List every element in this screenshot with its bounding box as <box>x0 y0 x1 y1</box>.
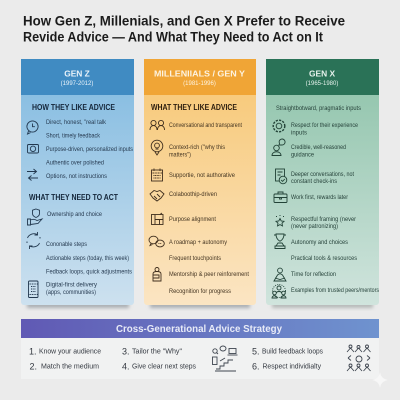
list: what they need to act: (apps, communities) <box>46 289 96 296</box>
list: gen x preferences: (never patronizing) <box>291 223 338 230</box>
list: millenial preferences: Recognition for progress <box>169 288 232 295</box>
list: gen x preferences: constant check-ins <box>291 178 338 185</box>
list: strategy steps 5-6: 5. <box>252 346 260 356</box>
list: strategy steps 1-2 <box>29 346 101 372</box>
list: gen x preferences: Practical tools & resources <box>291 255 358 262</box>
heading: Gen X <box>306 68 338 87</box>
decorative sparkle <box>372 372 388 388</box>
list: millenial preferences: A roadmap + autonomy <box>169 239 228 246</box>
heading: Millenials / Gen Y <box>154 68 245 87</box>
list: gen x preferences: inputs <box>291 130 308 136</box>
list: gen x preferences: Respect for their experience <box>291 122 358 129</box>
list: gen x preferences: Deeper conversations, not <box>291 171 354 178</box>
icon: seated person <box>274 268 286 281</box>
list: millenial preferences: Conversational and transparent <box>169 122 242 129</box>
list: gen x preferences: Time for reflection <box>291 271 336 278</box>
title: Revide Advice — And What They Need to Act on It <box>23 30 324 44</box>
icon: trophy <box>274 234 286 248</box>
list: millenial preferences: Colaboothip-driven <box>169 191 217 198</box>
icon: people cycle <box>347 345 370 371</box>
list: strategy steps 3-4: 4. <box>122 362 130 372</box>
icon: mentor <box>153 268 161 281</box>
heading: Gen X: (1965-1980) <box>306 81 338 87</box>
list: what they need to act: Ownership and choice <box>47 211 102 218</box>
panel: cross-generational strategy <box>21 319 379 379</box>
list: strategy steps 1-2: Know your audience <box>39 348 101 356</box>
list: how they like advice: Options, not instructions <box>46 173 108 180</box>
list: strategy steps 5-6: Build feedback loops <box>262 348 323 356</box>
title: How Gen Z, Millenials, and Gen X Prefer to Receive <box>23 14 345 28</box>
heading: how they like advice: HOW THEY LIKE ADVICE <box>32 103 115 112</box>
heading: Gen Z <box>61 68 93 87</box>
list: strategy steps 3-4: 3. <box>122 346 130 356</box>
list: how they like advice <box>46 119 134 180</box>
list: gen x preferences: guidance <box>291 152 314 158</box>
icon: map <box>152 213 163 224</box>
list: gen x preferences: Work first, rewards later <box>291 194 349 201</box>
list: strategy steps 3-4 <box>122 346 196 372</box>
icon: hand with shield <box>28 209 42 225</box>
icon: camera <box>28 144 38 153</box>
list: strategy steps 5-6: Respect individialty <box>262 364 321 370</box>
panel: Gen Z <box>21 59 134 308</box>
heading: Millenials / Gen Y: MILLENIIALS / GEN Y <box>154 68 245 78</box>
list: strategy steps 1-2: 1. <box>29 346 37 356</box>
list: gen x preferences <box>291 122 380 294</box>
icon: calendar <box>152 168 162 181</box>
icon: cycle arrows <box>27 232 40 249</box>
heading: strategy: Cross-Generational Advice Strategy <box>116 324 282 335</box>
icon: peer group <box>272 284 286 298</box>
list: what they need to act: Actionable steps (today, this week) <box>46 255 129 262</box>
list: gen x preferences: Examples from trusted peers/mentors <box>291 287 380 294</box>
heading: Gen X: GEN X <box>309 68 335 78</box>
icon: people <box>150 120 164 130</box>
icon: document check <box>276 169 287 184</box>
panel: Gen X <box>266 59 380 308</box>
heading: Millenials / Gen Y: (1981-1996) <box>183 81 216 87</box>
list: millenial preferences <box>169 122 249 295</box>
list: millenial preferences: Frequent touchpoints <box>169 255 222 262</box>
icon: stars <box>276 215 284 226</box>
icon: person with bubble <box>272 139 285 156</box>
list: how they like advice: Short, timely feedback <box>46 132 101 140</box>
list: strategy steps 5-6: 6. <box>252 362 260 372</box>
icon: bulb bubble <box>151 140 163 155</box>
icon: gear <box>273 120 285 132</box>
heading: Gen Z: GEN Z <box>64 68 90 78</box>
list: millenial preferences: Purpose alignment <box>169 216 216 223</box>
list: what they need to act: Cononable steps <box>46 241 88 248</box>
icon: phone <box>28 281 38 298</box>
list: what they need to act: Fedback loops, quick adjustments <box>46 268 133 276</box>
icon: briefcase <box>274 192 287 202</box>
panel: Millenials <box>144 59 256 308</box>
list: gen x preferences: Credible, well-reasoned <box>291 144 346 151</box>
list: strategy steps 3-4: Give clear next steps <box>132 364 196 370</box>
list: how they like advice: Purpose-driven, personalized inputs <box>46 146 134 153</box>
text: intro line: Straightbotward, pragmatic inputs <box>276 105 362 112</box>
heading: what they like advice: WHAT THEY LIKE ADVICE <box>151 103 237 112</box>
list: millenial preferences: Context-rich ("why this <box>169 144 226 151</box>
icon: stairs and devices <box>212 346 238 371</box>
icon: clock bubble <box>27 121 38 134</box>
list: how they like advice: Authentic over polished <box>46 160 104 166</box>
list: what they need to act <box>46 211 133 296</box>
icon: arrows <box>27 169 38 180</box>
list: how they like advice: Direct, honest, "real talk <box>46 119 107 126</box>
list: what they need to act: Digital-first delivery <box>46 282 98 288</box>
title <box>23 14 345 44</box>
list: strategy steps 5-6 <box>252 346 323 372</box>
list: millenial preferences: Supportie, not authorative <box>169 172 235 179</box>
list: strategy steps 1-2: Match the medium <box>41 364 99 370</box>
icon: handshake <box>150 190 164 201</box>
heading: what they need to act: WHAT THEY NEED TO ACT <box>29 193 118 202</box>
list: millenial preferences: Mentorship & peer reinforement <box>169 271 249 278</box>
list: strategy steps 1-2: 2. <box>30 362 37 372</box>
list: gen x preferences: Autonomy and choices <box>291 239 349 246</box>
list: strategy steps 3-4: Tailor the "Why" <box>132 348 183 356</box>
icon: chat bubbles <box>149 236 164 247</box>
list: gen x preferences: Respectful framing (never <box>291 216 357 223</box>
list: millenial preferences: matters") <box>169 152 191 158</box>
heading: Gen Z: (1997-2012) <box>61 81 93 87</box>
